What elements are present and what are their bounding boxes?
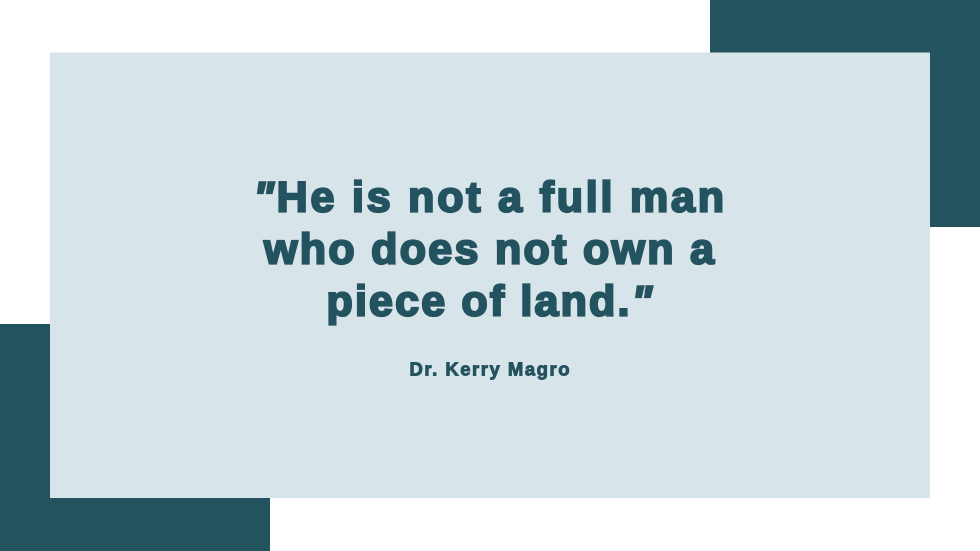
top right accent block [710, 0, 980, 227]
bottom left accent block [0, 324, 270, 551]
quote text: piece of land." [326, 278, 653, 326]
quote attribution: Dr. Kerry Magro [410, 358, 570, 380]
panel: quote background [50, 52, 930, 498]
quote text: who does not own a [263, 226, 715, 274]
quote text: "He is not a full man [254, 174, 724, 222]
quote text [254, 174, 724, 326]
